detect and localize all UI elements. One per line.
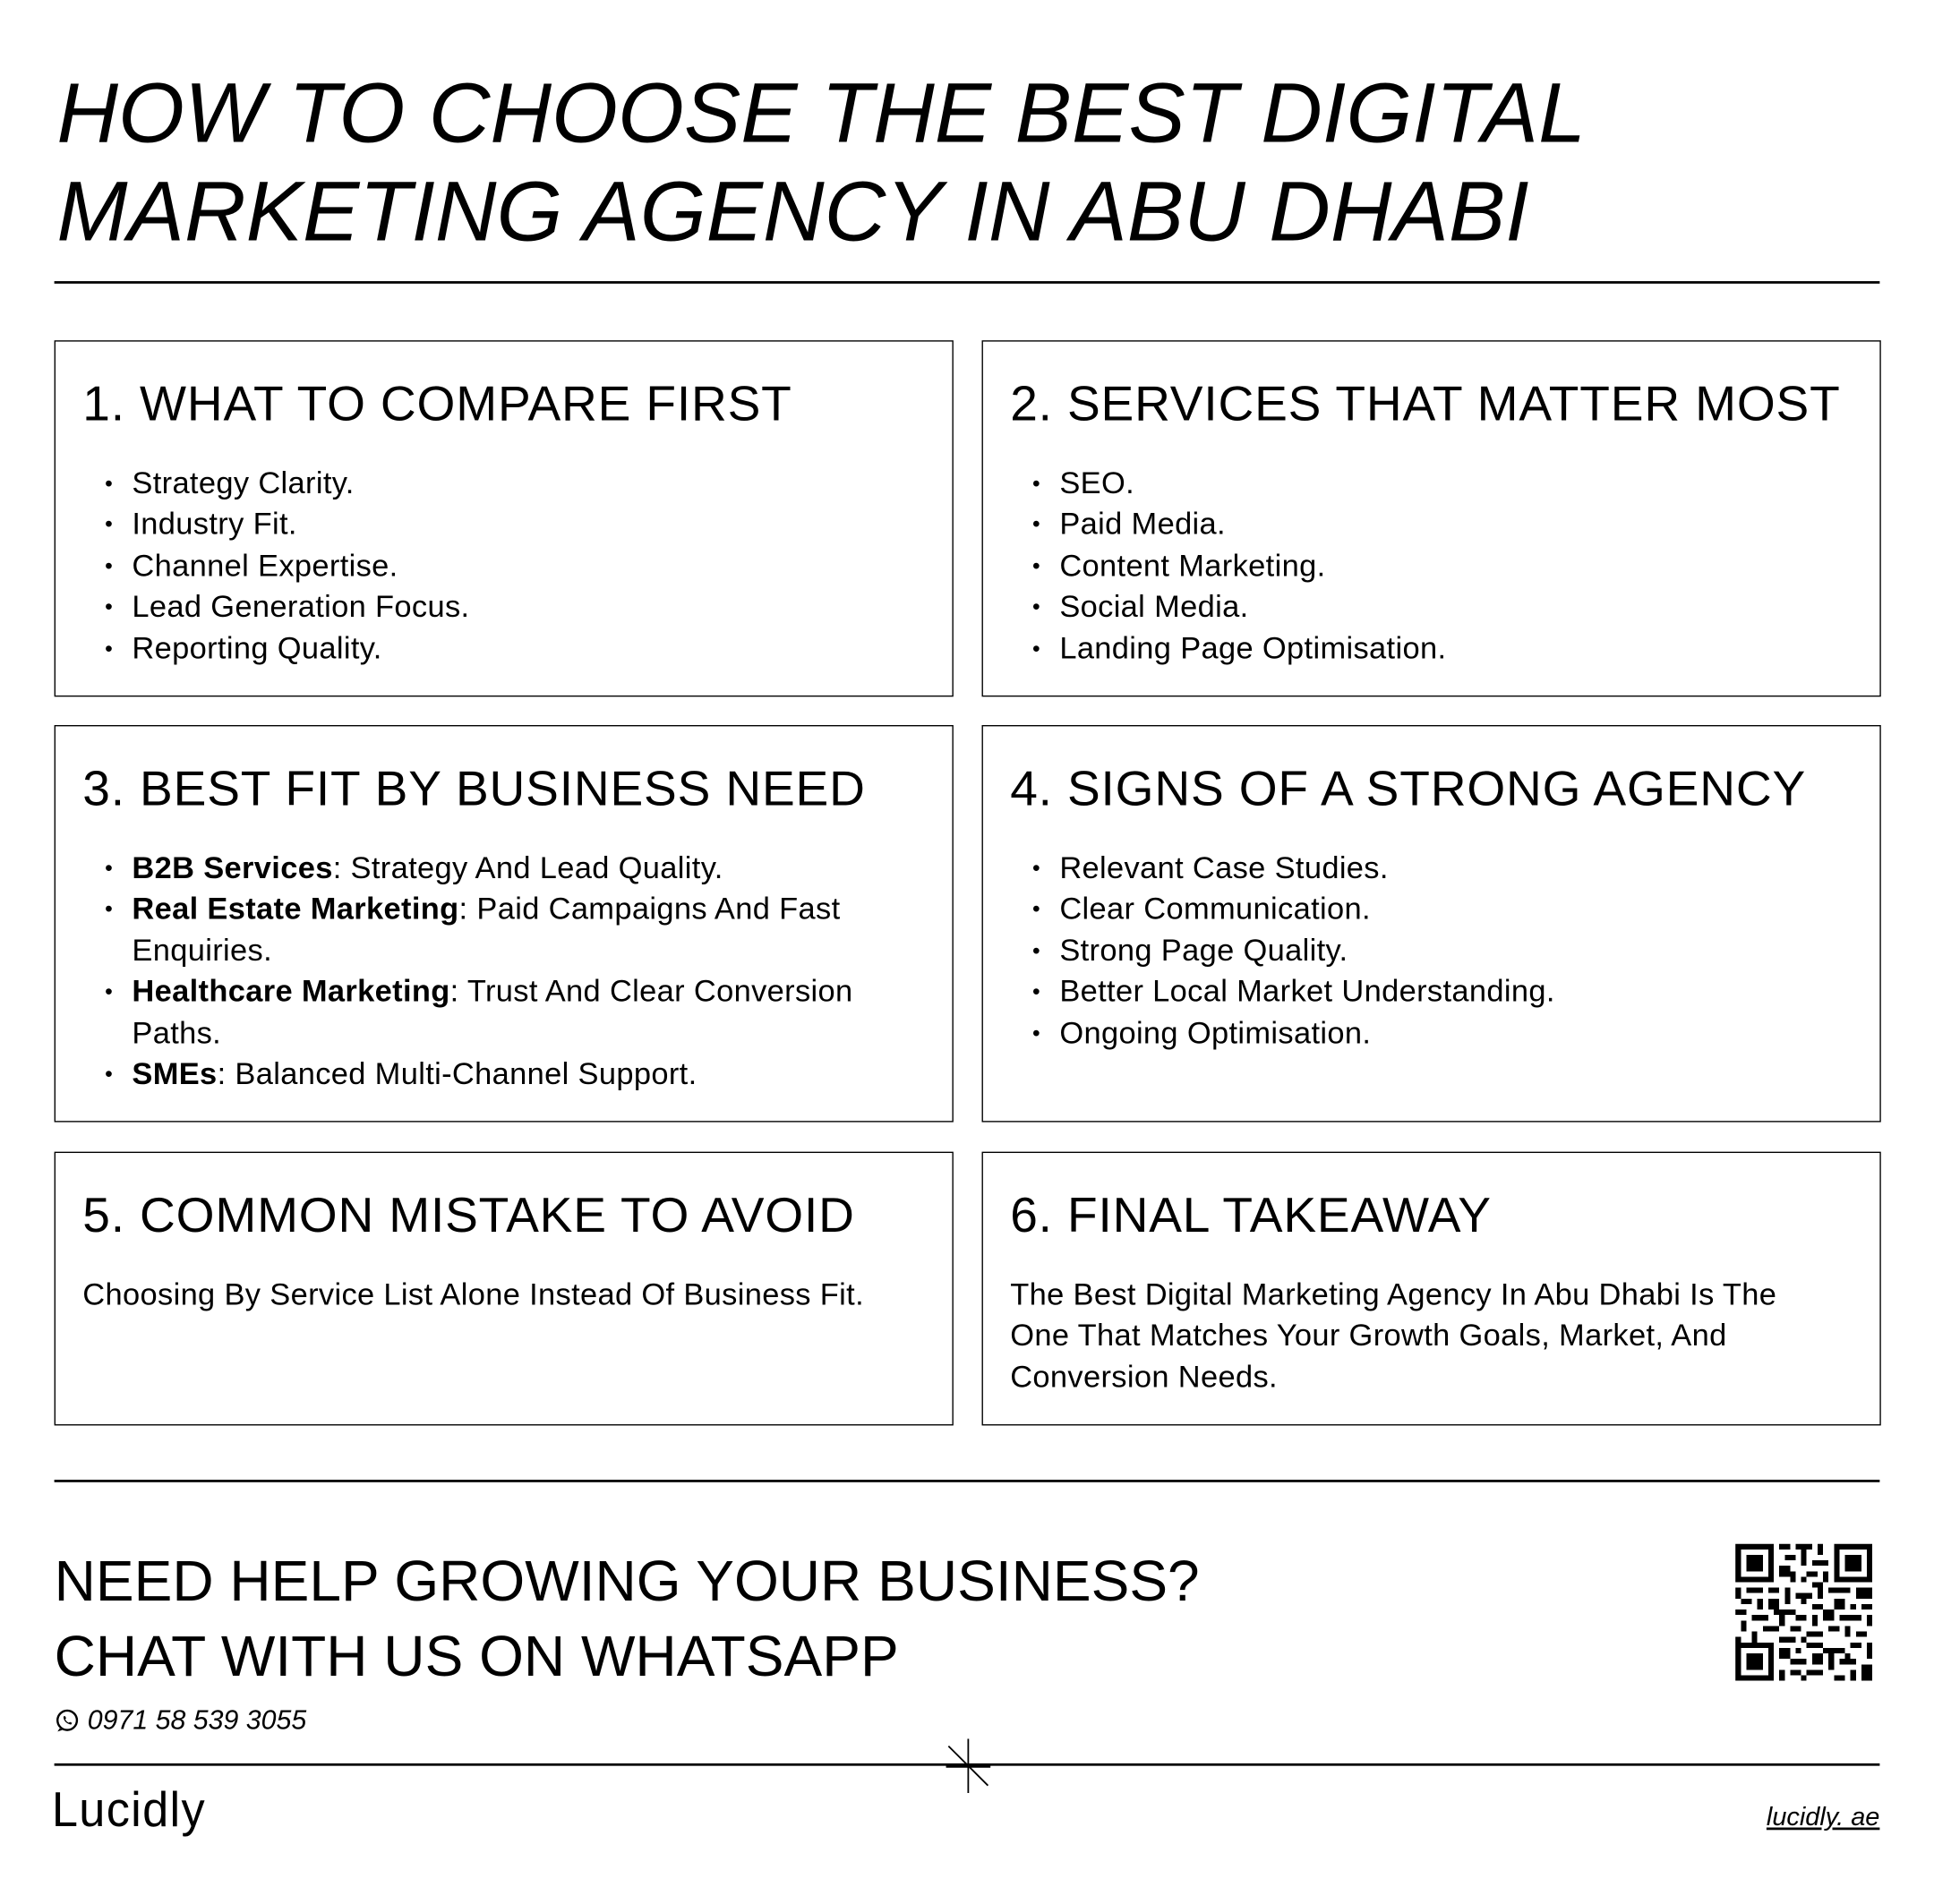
list 4: Strong Page Quality. (1059, 934, 1348, 968)
list 2 (1033, 466, 1446, 665)
heading 2: 2. SERVICES THAT MATTER MOST (1010, 378, 1841, 431)
list 3: Healthcare Marketing: Trust And Clear Conversion Paths. (132, 975, 853, 1050)
text 5: Choosing By Service List Alone Instead Of Business Fit. (82, 1277, 864, 1312)
phone with whatsapp icon: 0971 58 539 3055 (88, 1704, 306, 1735)
list 3: SMEs: Balanced Multi-Channel Support. (132, 1057, 697, 1091)
CTA heading: NEED HELP GROWING YOUR BUSINESS? (55, 1549, 1200, 1613)
list 1: Reporting Quality. (132, 631, 382, 665)
list 2: Paid Media. (1059, 508, 1226, 542)
list 1: Industry Fit. (132, 508, 297, 542)
heading 5: 5. COMMON MISTAKE TO AVOID (82, 1189, 855, 1243)
panel: best fit by business need (55, 725, 954, 1123)
list 4 (1033, 851, 1555, 1050)
panel: signs of a strong agency (982, 725, 1881, 1123)
list 4: Clear Communication. (1059, 892, 1371, 926)
panel: what to compare first (55, 340, 954, 696)
title: HOW TO CHOOSE THE BEST DIGITAL (56, 65, 1586, 160)
text 6: The Best Digital Marketing Agency In Abu Dhabi Is The One That Matches Your Growth Goals, Market, And Conversion Needs. (1010, 1277, 1776, 1395)
list 1: Channel Expertise. (132, 549, 398, 583)
panel: common mistake (55, 1152, 954, 1425)
title: MARKETING AGENCY IN ABU DHABI (56, 164, 1529, 259)
logo: Lucidly: Lucidly (52, 1783, 206, 1838)
list 4: Relevant Case Studies. (1059, 851, 1389, 885)
website link: lucidly. ae (1767, 1803, 1879, 1831)
list 4: Ongoing Optimisation. (1059, 1016, 1371, 1050)
list 1 (106, 466, 469, 665)
list 4: Better Local Market Understanding. (1059, 975, 1555, 1009)
list 2: Landing Page Optimisation. (1059, 631, 1446, 665)
list 1: Lead Generation Focus. (132, 590, 469, 624)
heading 6: 6. FINAL TAKEAWAY (1010, 1189, 1492, 1243)
CTA heading (55, 1549, 1200, 1688)
QR code (1735, 1543, 1872, 1681)
CTA heading: CHAT WITH US ON WHATSAPP (55, 1624, 899, 1688)
panel: final takeaway (982, 1152, 1881, 1425)
heading 3: 3. BEST FIT BY BUSINESS NEED (82, 762, 866, 816)
panel: services that matter most (982, 340, 1881, 696)
list 2: Social Media. (1059, 590, 1249, 624)
list 1: Strategy Clarity. (132, 466, 355, 500)
list 3: Real Estate Marketing: Paid Campaigns And Fast Enquiries. (132, 892, 840, 968)
list 3 (106, 851, 853, 1091)
icon: star cross (946, 1738, 990, 1793)
heading 1: 1. WHAT TO COMPARE FIRST (82, 378, 792, 431)
icon: whatsapp (56, 1710, 79, 1731)
heading 4: 4. SIGNS OF A STRONG AGENCY (1010, 762, 1806, 816)
title (56, 65, 1586, 259)
list 2: Content Marketing. (1059, 549, 1325, 583)
list 2: SEO. (1059, 466, 1134, 500)
list 3: B2B Services: Strategy And Lead Quality. (132, 851, 723, 885)
